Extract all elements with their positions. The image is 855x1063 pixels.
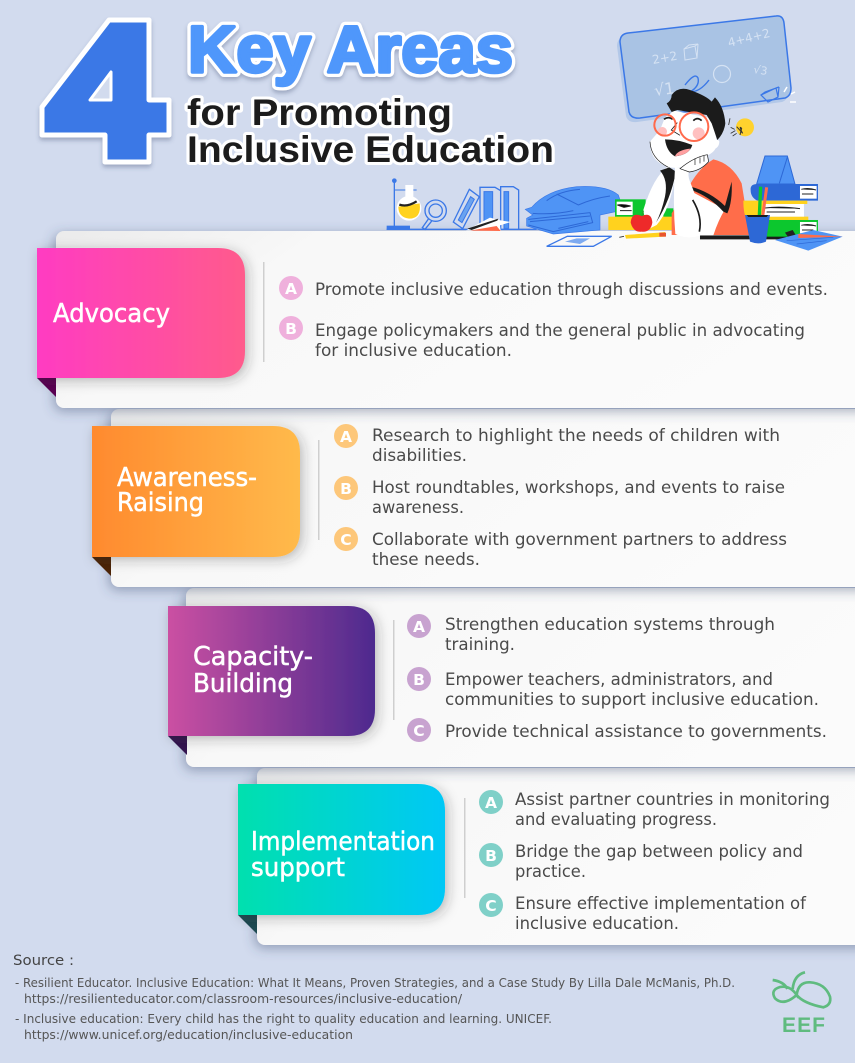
- item B: [479, 842, 803, 881]
- item A: A: [413, 618, 425, 636]
- heading: Inclusive Education: Inclusive Education: [187, 129, 554, 170]
- item B: B: [340, 480, 352, 498]
- item A: disabilities.: [372, 446, 467, 465]
- item B: practice.: [515, 862, 586, 881]
- item A: Promote inclusive education through discussions and events.: [315, 280, 828, 299]
- icon: books on shelf: [387, 187, 537, 229]
- icon: blackboard: 4+4+2: [726, 26, 771, 50]
- item B: Engage policymakers and the general public in advocating: [315, 321, 805, 340]
- tab: Awareness-Raising: Awareness-: [117, 463, 257, 493]
- item B: communities to support inclusive education.: [445, 690, 819, 709]
- heading: for Promoting: for Promoting: [187, 92, 452, 133]
- icon: pencil cup: [745, 187, 770, 243]
- icon: pencil on desk: [619, 232, 666, 239]
- heading: Key Areas: Key Areas: [188, 12, 513, 86]
- icon: right book stack: [743, 156, 818, 237]
- item B: B: [285, 320, 297, 338]
- panel: implementation support: [238, 768, 855, 945]
- tab: Capacity-Building: Capacity-: [193, 642, 313, 672]
- icon: light bulb: [729, 118, 754, 136]
- item C: C: [485, 897, 497, 915]
- tab: Advocacy: [37, 248, 245, 378]
- source block: - Resilient Educator. Inclusive Education: What It Means, Proven Strategies, and a Case Study By Lilla Dale McManis, Ph.D.: [15, 976, 735, 990]
- item C: C: [340, 531, 352, 549]
- tab: Implementation support: Implementation: [251, 827, 435, 857]
- item B: [334, 476, 785, 517]
- icon: apple: [631, 211, 652, 232]
- item B: [407, 667, 819, 709]
- heading: Inclusive Education: Inclusive Education: [187, 129, 554, 170]
- item A: and evaluating progress.: [515, 810, 717, 829]
- icon: paper on desk: [547, 236, 612, 246]
- item C: these needs.: [372, 550, 480, 569]
- icon: open book: [466, 218, 511, 231]
- source block: https://www.unicef.org/education/inclusive-education: [24, 1028, 353, 1042]
- logo: EEF: EEF: [782, 1014, 825, 1037]
- item B: B: [413, 671, 425, 689]
- item C: [334, 527, 787, 569]
- item A: Research to highlight the needs of children with: [372, 426, 780, 445]
- icon: blackboard: √1: [653, 78, 676, 100]
- item C: Collaborate with government partners to address: [372, 530, 787, 549]
- item C: [479, 893, 807, 933]
- title: [42, 12, 554, 170]
- big number 4: [42, 20, 169, 162]
- icon: blackboard: √3: [753, 63, 768, 78]
- tab fold: [37, 378, 56, 397]
- heading: for Promoting: for Promoting: [187, 92, 452, 133]
- item B: for inclusive education.: [315, 341, 512, 360]
- item B: Host roundtables, workshops, and events to raise: [372, 478, 785, 497]
- item A: A: [340, 428, 352, 446]
- panel: capacity-building: [168, 588, 855, 767]
- tab: Awareness-Raising: Raising: [117, 488, 204, 518]
- icon: flask on stand: [387, 178, 421, 230]
- item C: inclusive education.: [515, 914, 679, 933]
- item A: [479, 790, 830, 829]
- item B: Bridge the gap between policy and: [515, 842, 803, 861]
- tab: Awareness-Raising: [92, 426, 300, 557]
- icon: green and yellow books: [608, 199, 675, 230]
- source block: https://resilienteducator.com/classroom-resources/inclusive-education/: [24, 992, 463, 1006]
- item A: training.: [445, 635, 515, 654]
- tab: Capacity-Building: Building: [193, 669, 293, 699]
- heading: Key Areas: Key Areas: [188, 12, 513, 86]
- logo: EEF: [773, 972, 830, 1037]
- panel: advocacy: [37, 231, 855, 408]
- item A: [334, 424, 780, 465]
- tab fold: [92, 557, 111, 576]
- item A: Assist partner countries in monitoring: [515, 790, 830, 809]
- item C: Ensure effective implementation of: [515, 894, 807, 913]
- tab: Implementation support: [238, 784, 445, 915]
- tab: Implementation support: support: [251, 853, 345, 883]
- item A: A: [285, 280, 297, 298]
- icon: keyboard sheet and ruler: [775, 230, 843, 251]
- item A: A: [485, 794, 497, 812]
- item B: awareness.: [372, 498, 464, 517]
- panel: awareness-raising: [92, 409, 855, 587]
- source block: - Inclusive education: Every child has the right to quality education and learning. UNICEF.: [15, 1012, 552, 1026]
- item A: [407, 614, 775, 654]
- source block: Source :: [13, 953, 74, 969]
- tab: Capacity-Building: [168, 606, 375, 736]
- item C: Provide technical assistance to governments.: [445, 722, 827, 741]
- item B: Empower teachers, administrators, and: [445, 670, 773, 689]
- icon: student character: [643, 89, 807, 239]
- tab fold: [168, 736, 187, 755]
- tab: Advocacy: Advocacy: [53, 299, 170, 329]
- icon: blackboard: 2+2: [651, 49, 678, 67]
- icon: magnifier: [422, 200, 446, 229]
- icon: blackboard: [617, 16, 796, 122]
- item C: C: [413, 722, 425, 740]
- tab fold: [238, 915, 257, 934]
- item B: [279, 316, 805, 360]
- icon: backpack: [525, 186, 623, 234]
- source block: [13, 953, 735, 1042]
- item B: B: [485, 847, 497, 865]
- item A: Strengthen education systems through: [445, 615, 775, 634]
